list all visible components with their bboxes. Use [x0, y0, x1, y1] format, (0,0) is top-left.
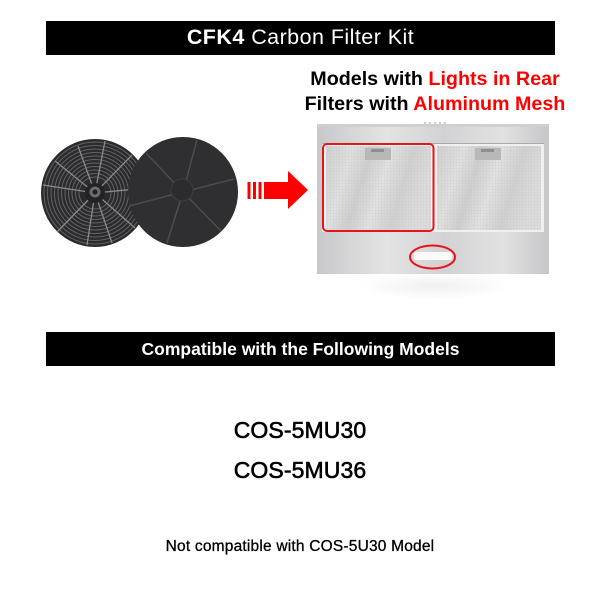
section bar: [46, 332, 555, 366]
model: COS-5MU36: COS-5MU36: [234, 457, 366, 483]
model: COS-5MU30: COS-5MU30: [234, 417, 366, 443]
title bar: [46, 21, 555, 55]
section bar: Compatible with the Following Models: [142, 339, 459, 359]
note: Not compatible with COS-5U30 Model: [166, 538, 434, 555]
callout: lights highlight: [410, 246, 455, 268]
title bar: CFK4 Carbon Filter Kit: [187, 25, 414, 49]
heading: models and filters: [305, 68, 565, 114]
range hood: [317, 122, 549, 300]
heading: models and filters: Models with Lights in Rear: [310, 68, 560, 90]
product illustrations: [41, 122, 549, 292]
icon: ribbed carbon filter: [41, 139, 149, 247]
arrow: [248, 171, 308, 209]
heading: models and filters: Filters with Aluminum Mesh: [305, 92, 565, 114]
icon: flat carbon filter: [128, 137, 238, 247]
callout: filter highlight: [323, 144, 434, 231]
